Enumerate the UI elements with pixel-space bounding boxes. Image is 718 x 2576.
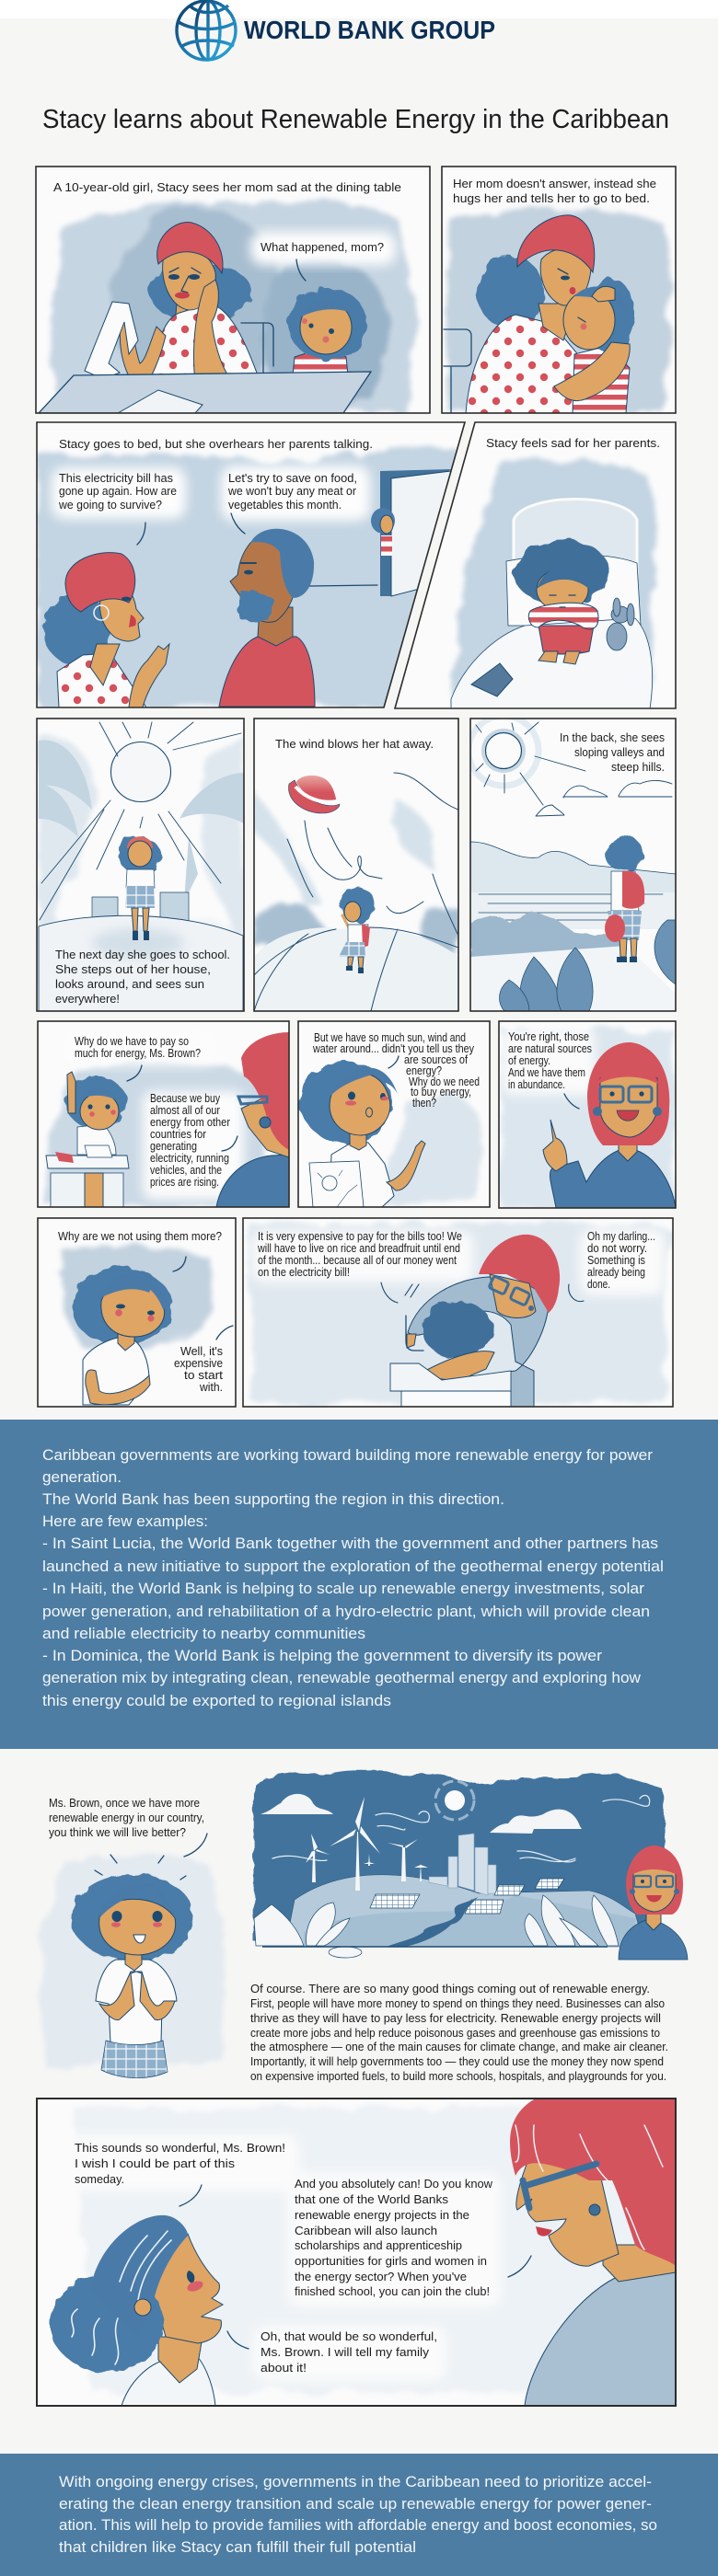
teacher speech: [150, 1092, 230, 1189]
speech text: are sources of: [404, 1053, 468, 1066]
watercolour wash: [250, 1224, 666, 1403]
speech tail: [296, 259, 306, 281]
houses: [92, 892, 190, 920]
text block: benefits of renewable energy: Importantly, it will help governments too — they could use the money they now spend: [250, 2055, 664, 2068]
panel: classroom question: [38, 1021, 289, 1207]
caption: The next day she goes to school.: [55, 949, 230, 961]
school desk: [46, 1145, 129, 1207]
panel: closing message band: that children like Stacy can fulfill their full potential: [59, 2538, 416, 2556]
text block: benefits of renewable energy: First, people will have more money to spend on things they need. Businesses can also: [250, 1997, 665, 2010]
wind turbines: [306, 1797, 428, 1891]
speech text: But we have so much sun, wind and: [314, 1031, 466, 1044]
panel: closing message band: [0, 2454, 718, 2576]
speech bubble: [250, 232, 396, 265]
Stacy raising hand: [65, 1072, 126, 1155]
text block: benefits of renewable energy: on expensive imported fuels, to build more schools, hospitals, and playgrounds for you.: [250, 2070, 666, 2083]
speech: teacher: already being: [587, 1266, 645, 1279]
panel: sloping valleys and hills: [469, 716, 676, 1011]
speech: Stacy: It is very expensive to pay for the bills too! We: [258, 1230, 462, 1243]
panel: sun everywhere: [37, 719, 244, 1011]
panel: World Bank support band: Here are few examples:: [42, 1512, 208, 1530]
speech text: Why do we need: [409, 1075, 480, 1088]
speech text: to buy energy,: [411, 1086, 471, 1098]
clouds: [261, 1794, 582, 1834]
question text: Why are we not using them more?: [58, 1230, 222, 1243]
panel: World Bank support band: generation.: [42, 1468, 122, 1486]
teacher from behind: [216, 1032, 289, 1207]
panel: World Bank support band: and reliable electricity to nearby communities: [42, 1625, 365, 1642]
wind swirls: [272, 1795, 650, 1862]
caption: Her mom doesn't answer, instead she: [453, 178, 656, 190]
caption: sloping valleys and: [574, 746, 665, 759]
desk: [390, 1363, 511, 1407]
panel: parents talking: [37, 422, 465, 707]
Stacy speech: much for energy, Ms. Brown?: [75, 1047, 201, 1060]
Ms. Brown speech: scholarships and apprenticeship: [295, 2239, 462, 2252]
watercolour wash: [44, 1032, 267, 1207]
dad speech: we won't buy any meat or: [227, 485, 356, 498]
road: [254, 927, 458, 1011]
caption: [453, 178, 656, 205]
panel: World Bank support band: power generation, and rehabilitation of a hydro-electric plant, which will provide clean: [42, 1603, 650, 1620]
panel: Stacy sad in bed: [395, 422, 676, 708]
mom speech: gone up again. How are: [59, 485, 177, 498]
Stacy profile: [50, 2215, 223, 2406]
panel: World Bank support band: The World Bank has been supporting the region in this direction.: [42, 1490, 504, 1508]
watercolour wash: [377, 1095, 481, 1205]
river: [387, 1897, 478, 1947]
watercolour wash: [451, 460, 655, 708]
wind-bent trees: [254, 791, 458, 957]
watercolour wash: [502, 1030, 676, 1208]
speech text: then?: [412, 1097, 436, 1110]
watercolour wash: [52, 200, 411, 414]
caption: [560, 731, 665, 774]
speech text: renewable energy in our country,: [49, 1811, 204, 1824]
caption: [55, 949, 230, 1006]
palm washes: [39, 735, 244, 984]
sky: [253, 1770, 665, 1941]
sun rays: [476, 722, 585, 805]
dad speech: vegetables this month.: [228, 499, 342, 512]
foreground leaves: [254, 1895, 619, 1958]
speech text: in abundance.: [508, 1078, 565, 1091]
panel: closing message band: With ongoing energy crises, governments in the Caribbean need to prioritize accel-: [59, 2473, 652, 2490]
speech text: [508, 1030, 592, 1091]
speech: teacher: Oh my darling...: [587, 1230, 655, 1243]
Ms. Brown profile: [510, 2099, 676, 2406]
panel: World Bank support band: - In Saint Lucia, the World Bank together with the government and other partners has: [42, 1535, 658, 1552]
Ms. Brown speech: that one of the World Banks: [295, 2193, 448, 2206]
text block: benefits of renewable energy: thrive as they will have to pay less for electricity. Renewable energy projects will: [250, 2012, 661, 2025]
text block: benefits of renewable energy: Of course. There are so many good things coming out of renewable energy.: [250, 1983, 650, 1995]
speech text: water around... didn't you tell us they: [312, 1042, 475, 1055]
speech tails: [180, 2185, 531, 2349]
Stacy walking: [119, 836, 161, 940]
watercolour wash: [59, 1247, 231, 1398]
foreground plants: [500, 920, 676, 1011]
chair: [241, 323, 273, 375]
open book: [471, 663, 513, 696]
Stacy hugged: [563, 278, 635, 413]
drawing paper: [309, 1161, 364, 1207]
teacher speech: vehicles, and the: [150, 1164, 222, 1177]
door with Stacy peeking: [309, 469, 451, 596]
near hills: [470, 914, 626, 957]
teacher speech: countries for: [150, 1128, 206, 1141]
speech: Stacy: will have to live on rice and breadfruit until end: [257, 1242, 460, 1255]
panel: World Bank support band: generation mix by integrating clean, renewable geothermal energy and exploring how: [42, 1669, 642, 1686]
teacher speech: electricity, running: [150, 1152, 229, 1165]
text block: benefits of renewable energy: [250, 1983, 668, 2083]
caption: Stacy goes to bed, but she overhears her parents talking.: [59, 438, 373, 451]
Ms. Brown speech: the energy sector? When you've: [295, 2271, 467, 2283]
panel: World Bank support band: this energy could be exported to regional islands: [42, 1692, 391, 1709]
palm fronds: [39, 740, 244, 902]
speech tail: [564, 1094, 579, 1109]
dad speaking: [219, 529, 315, 707]
speech text: of energy.: [508, 1054, 550, 1067]
chair: [444, 329, 471, 413]
flying hat: [288, 776, 340, 813]
Stacy: [300, 1062, 425, 1207]
mom speech: This electricity bill has: [59, 472, 173, 485]
mom: [120, 222, 258, 390]
girl Stacy: [285, 288, 367, 375]
speech: Stacy: of the month... because all of our money went: [258, 1254, 457, 1267]
speech text: You're right, those: [508, 1030, 589, 1043]
sun rays: [40, 722, 241, 920]
Stacy speech 1: someday.: [75, 2173, 124, 2186]
mom speaking: [43, 553, 169, 707]
panel: closing message band: erating the clean energy transition and scale up renewable energy for power gener-: [59, 2495, 652, 2513]
logo: World Bank Group: [177, 0, 495, 60]
teacher bending: [408, 1235, 560, 1407]
pointing hand: [543, 1120, 567, 1171]
Stacy with hat and backpack: [605, 836, 644, 962]
Stacy speech 2: [261, 2330, 437, 2375]
caption: looks around, and sees sun: [55, 978, 204, 991]
answer text: to start: [184, 1369, 224, 1382]
dad speech: [227, 472, 357, 512]
table: [39, 372, 371, 413]
Ms. Brown speech: opportunities for girls and women in: [295, 2255, 487, 2268]
panel: Stacy asks about living better: [41, 1797, 224, 2078]
speech: teacher: do not worry.: [587, 1242, 647, 1255]
Stacy thinking: [71, 1268, 172, 1405]
dad speech: Let's try to save on food,: [228, 472, 357, 485]
sun: [110, 742, 171, 802]
speech: Stacy: on the electricity bill!: [258, 1266, 350, 1279]
speech text: you think we will live better?: [49, 1826, 186, 1839]
Stacy hopeful: [71, 1874, 194, 2078]
hills: [470, 842, 676, 897]
panel: mom sad at the dining table: [36, 167, 430, 414]
text block: benefits of renewable energy: create more jobs and help reduce poisonous gases and greenhouse gas emissions to: [250, 2027, 660, 2040]
sun with halo: [435, 1781, 474, 1820]
panel: World Bank support band: - In Dominica, the World Bank is helping the government to diversify its power: [42, 1647, 602, 1664]
speech text: What happened, mom?: [261, 241, 384, 254]
caption: In the back, she sees: [560, 731, 665, 744]
illustration: renewable energy landscape: [253, 1770, 688, 1960]
Ms. Brown speech: Caribbean will also launch: [295, 2225, 437, 2237]
teacher speech: almost all of our: [150, 1104, 220, 1117]
clouds: [536, 780, 672, 816]
teacher speech: prices are rising.: [150, 1176, 219, 1189]
title: Stacy learns about Renewable Energy in the Caribbean: [42, 105, 669, 134]
city towers: [429, 1834, 496, 1895]
Stacy speech: [75, 1035, 201, 1060]
speech bubbles: [52, 466, 370, 521]
speech tail: [95, 1834, 207, 1880]
sun with halo: [469, 716, 538, 786]
speech: teacher: Something is: [587, 1254, 645, 1267]
answer text: with.: [199, 1381, 223, 1394]
emphasis marks and speech tails: [381, 1282, 584, 1303]
hills: [285, 1875, 644, 1947]
speech: teacher: [587, 1230, 655, 1291]
watercolour wash: [37, 449, 465, 707]
panel: wind blows hat away: [254, 719, 458, 1011]
speech text: are natural sources: [508, 1042, 592, 1055]
speech: Stacy: [257, 1230, 462, 1279]
Ms. Brown speech: And you absolutely can! Do you know: [295, 2178, 493, 2191]
speech tails: [127, 1065, 237, 1151]
answer text: [174, 1345, 224, 1394]
teacher speech: Because we buy: [150, 1092, 221, 1105]
panel: Stacy asks why buy energy: [298, 1021, 490, 1207]
caption: steep hills.: [611, 761, 665, 774]
speech text: Ms. Brown, once we have more: [49, 1797, 200, 1810]
panel: closing message band: ation. This will help to provide families with affordable energy and boost economies, so: [59, 2516, 657, 2534]
icon: globe: [177, 0, 236, 60]
wind lines: [287, 773, 458, 934]
speech text: [312, 1031, 480, 1110]
answer text: Well, it's: [180, 1345, 223, 1358]
speech text: energy?: [406, 1064, 442, 1077]
headboard: [514, 499, 637, 589]
speech: teacher: done.: [587, 1278, 610, 1291]
panel: teacher comforts Stacy: [243, 1218, 673, 1407]
teacher speech: generating: [150, 1140, 197, 1153]
Ms. Brown speech: renewable energy projects in the: [295, 2209, 469, 2222]
caption: A 10-year-old girl, Stacy sees her mom sad at the dining table: [53, 181, 401, 194]
mom arm: [554, 342, 630, 401]
panel: mom hugs Stacy: [442, 167, 676, 413]
caption: She steps out of her house,: [55, 963, 211, 976]
watercolour wash: [74, 2107, 644, 2392]
teacher portrait: [619, 1846, 688, 1960]
caption: The wind blows her hat away.: [275, 738, 434, 751]
Stacy speech 1: [75, 2142, 285, 2186]
speech text: [49, 1797, 204, 1839]
panel: teacher natural sources: [499, 1021, 676, 1208]
bunny toy: [607, 598, 634, 650]
Stacy in wind: [339, 888, 376, 973]
caption: Stacy feels sad for her parents.: [486, 437, 660, 450]
paper bill: [85, 302, 138, 379]
panel: World Bank support band: - In Haiti, the World Bank is helping to scale up renewable energy investments, solar: [42, 1580, 644, 1597]
solar panels: [370, 1879, 564, 1914]
mom speech: [58, 472, 177, 512]
Stacy speech 2: about it!: [261, 2362, 307, 2375]
Ms. Brown speech: [295, 2178, 493, 2298]
sea: [470, 892, 676, 929]
Stacy speech 1: This sounds so wonderful, Ms. Brown!: [75, 2142, 285, 2155]
road: [39, 915, 243, 1011]
Stacy crying on desk: [406, 1301, 494, 1380]
mom speech: we going to survive?: [58, 499, 162, 512]
caption: hugs her and tells her to go to bed.: [453, 192, 650, 205]
watercolour wash: [446, 207, 670, 413]
Stacy speech 2: Oh, that would be so wonderful,: [261, 2330, 437, 2343]
panel: Stacy and Ms. Brown conversation: [37, 2099, 676, 2406]
speech tails: [137, 513, 245, 545]
wordmark: WORLD BANK GROUP: [244, 16, 495, 44]
Stacy speech 1: I wish I could be part of this: [75, 2157, 235, 2170]
Stacy speech 2: Ms. Brown. I will tell my family: [261, 2346, 430, 2359]
Ms. Brown speech: finished school, you can join the club!: [295, 2285, 490, 2298]
speech text: And we have them: [508, 1066, 585, 1079]
pale wash: [41, 1857, 224, 2070]
speech tail: [388, 1056, 399, 1068]
panel: why not use them more: [38, 1218, 236, 1407]
teacher: [550, 1042, 676, 1208]
caption: everywhere!: [55, 993, 120, 1006]
teacher speech: energy from other: [150, 1116, 230, 1129]
Stacy on bed: [514, 539, 609, 664]
panel: World Bank support band: [0, 1420, 718, 1749]
answer text: expensive: [174, 1357, 223, 1370]
text block: benefits of renewable energy: the atmosphere — one of the main causes for climate change, and make air cleaner.: [250, 2041, 668, 2053]
panel: World Bank support band: launched a new initiative to support the exploration of the geothermal energy potential: [42, 1558, 664, 1575]
mom: [466, 215, 595, 413]
speech tails: [173, 1257, 233, 1340]
Stacy speech: Why do we have to pay so: [75, 1035, 189, 1048]
bed and pillow: [451, 555, 653, 708]
panel: World Bank support band: Caribbean governments are working toward building more renewable energy for power: [42, 1446, 653, 1464]
